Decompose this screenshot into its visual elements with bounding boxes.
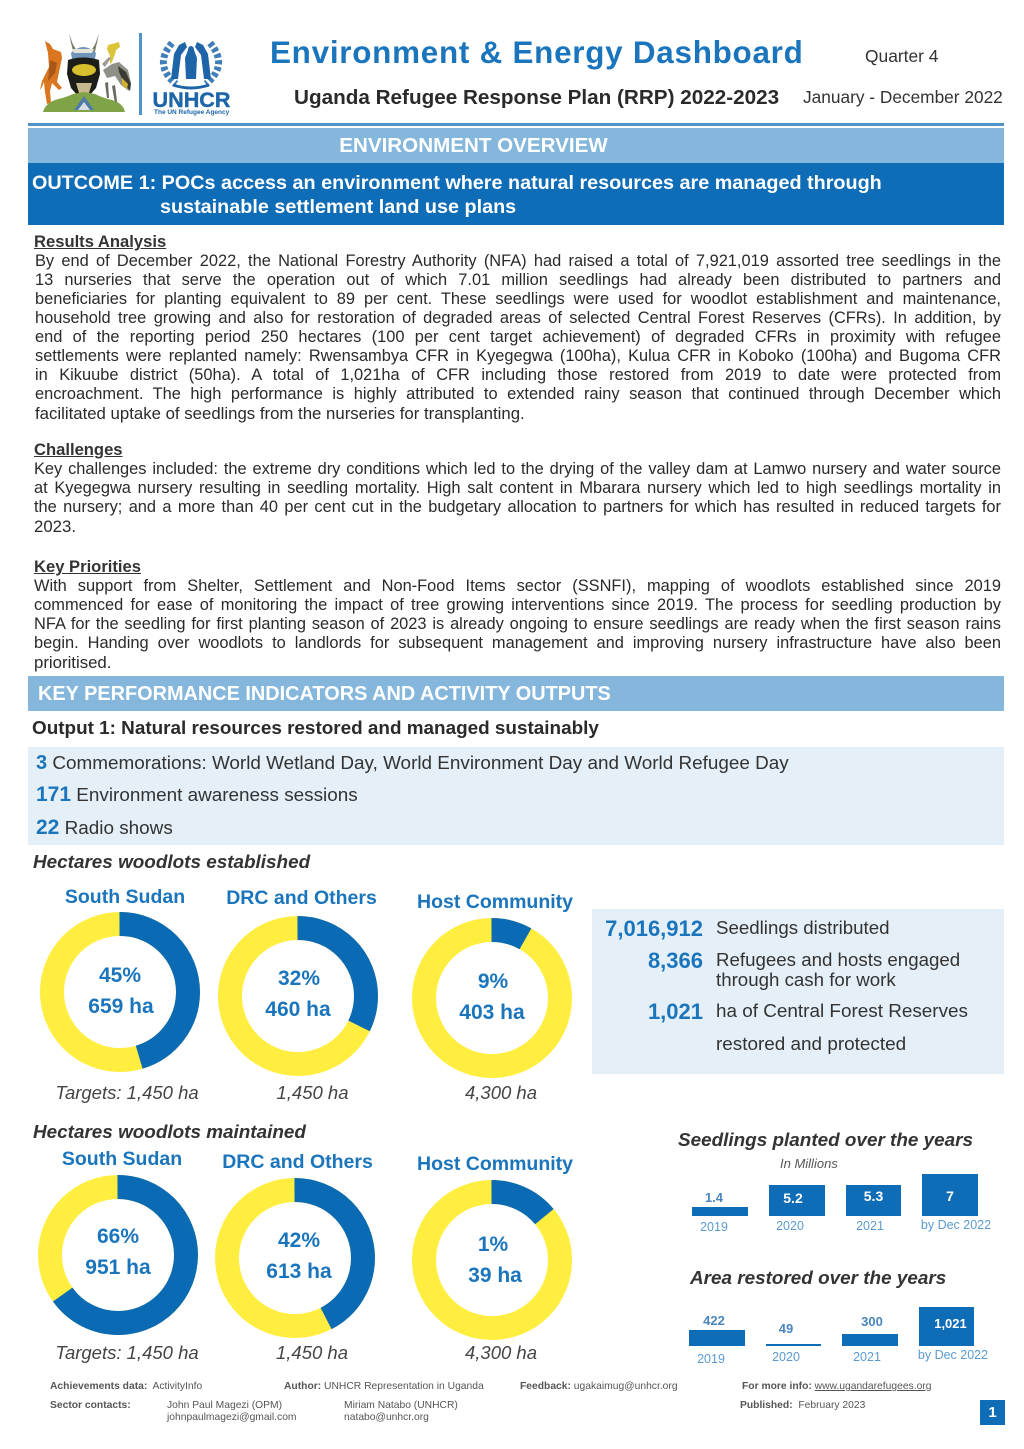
bar chart: seedlings planted: 2020 xyxy=(776,1219,804,1233)
donut title: Host Community xyxy=(417,1153,573,1175)
donut chart xyxy=(215,1178,375,1338)
donut hectares: 951 ha xyxy=(85,1256,151,1279)
stat: awareness sessions: 171 Environment awareness sessions xyxy=(36,783,358,806)
panel: key figures xyxy=(592,909,1004,1074)
text block: challenges: at Kyegegwa nursery resulting in seedling mortality. High salt content in Mbarara nursery which led to high seedlings mortality in xyxy=(34,479,1001,497)
donut value: 45% xyxy=(99,964,141,987)
header rule xyxy=(28,123,1004,126)
text block: results analysis: end of the reporting period 250 hectares (100 per cent target achievement) of degraded CFRs in proximity with refugee xyxy=(35,328,1001,346)
text block: key priorities: begin. Handing over woodlots to landlords for subsequent management and improving nursery infrastructure have also been xyxy=(34,634,1001,652)
figure: people engaged: through cash for work xyxy=(716,969,896,990)
donut group: DRC maintained xyxy=(215,1151,375,1363)
figure: central forest reserves: restored and protected xyxy=(716,1034,906,1055)
title: Environment & Energy Dashboard xyxy=(270,35,804,70)
bar chart: area restored: 1,021 xyxy=(934,1316,967,1331)
footer: OPM contact xyxy=(166,1400,297,1423)
banner: outcome 1 xyxy=(28,163,1004,225)
logo divider xyxy=(139,33,142,115)
donut target: Targets: 1,450 ha xyxy=(55,1082,199,1103)
bar chart: seedlings planted: 5.2 xyxy=(783,1190,803,1206)
footer: UNHCR contact: Miriam Natabo (UNHCR) xyxy=(344,1400,458,1411)
text block: challenges xyxy=(34,460,1001,536)
text block: results analysis: By end of December 2022, the National Forestry Authority (NFA) had raised a total of 7,921,019 assorted tree seedlings in the xyxy=(35,252,1001,270)
donut hectares: 460 ha xyxy=(265,998,331,1021)
banner: key performance indicators: KEY PERFORMANCE INDICATORS AND ACTIVITY OUTPUTS xyxy=(38,683,611,705)
heading: area restored: Area restored over the years xyxy=(690,1268,946,1289)
stat: commemorations: 3 Commemorations: World Wetland Day, World Environment Day and World Refugee Day xyxy=(36,752,789,774)
bar chart: area restored: 300 xyxy=(861,1314,883,1329)
donut group: Host Community established xyxy=(412,891,573,1103)
text block: results analysis: 13 nurseries that serve the operation out of which 7.01 million seedlings had already been distributed to partners and xyxy=(35,271,1001,289)
bar chart: area restored: 2021 xyxy=(853,1350,881,1364)
donut group: South Sudan maintained xyxy=(38,1148,199,1363)
footer: more info: For more info: www.ugandarefugees.org xyxy=(742,1381,931,1392)
subtitle: Uganda Refugee Response Plan (RRP) 2022-2023 xyxy=(294,86,779,109)
page number: 1 xyxy=(988,1404,997,1421)
figure: central forest reserves xyxy=(648,999,968,1055)
banner: environment overview xyxy=(28,128,1004,163)
footer: published: Published: February 2023 xyxy=(740,1400,865,1411)
footer: author: Author: UNHCR Representation in Uganda xyxy=(284,1381,484,1392)
donut chart xyxy=(412,1180,572,1340)
donut value: 32% xyxy=(278,967,320,990)
donut hectares: 659 ha xyxy=(88,995,154,1018)
footer: feedback: Feedback: ugakaimug@unhcr.org xyxy=(520,1381,678,1392)
outcome line 1: OUTCOME 1: POCs access an environment where natural resources are managed through xyxy=(32,172,882,194)
text block: results analysis: household tree growing and also for restoration of degraded areas of selected Central Forest Reserves (CFRs). In addition, by xyxy=(35,309,1001,327)
footer: UNHCR contact: natabo@unhcr.org xyxy=(344,1412,429,1423)
text block: results analysis: facilitated uptake of seedlings from the nurseries for transplanting. xyxy=(35,404,525,423)
bar chart: area restored: 422 xyxy=(703,1313,725,1328)
footer: sector contacts: Sector contacts: xyxy=(50,1400,131,1411)
heading: woodlots maintained: Hectares woodlots maintained xyxy=(33,1122,306,1143)
page number xyxy=(980,1400,1005,1425)
donut title: Host Community xyxy=(417,891,573,913)
heading: output 1: Output 1: Natural resources restored and managed sustainably xyxy=(32,718,599,739)
text block: results analysis: settlements were replanted namely: Rwensambya CFR in Kyegegwa (100ha), Kulua CFR in Koboko (100ha) and Bugoma CFR xyxy=(35,347,1001,365)
text block: key priorities: With support from Shelter, Settlement and Non-Food Items sector (SSNFI), mapping of woodlots established since 2019 xyxy=(34,577,1001,595)
donut target: 1,450 ha xyxy=(276,1342,348,1363)
donut title: DRC and Others xyxy=(222,1151,373,1173)
outcome line 2: sustainable settlement land use plans xyxy=(160,196,516,218)
figure: central forest reserves: 1,021 xyxy=(648,999,703,1024)
logo: Uganda coat of arms xyxy=(40,33,131,112)
donut value: 66% xyxy=(97,1225,139,1248)
heading: woodlots established: Hectares woodlots established xyxy=(33,852,310,873)
panel: activity counts xyxy=(28,747,1004,845)
text block: key priorities: NFA for the seedling for first planting season of 2023 is already ongoing to ensure seedlings are ready when the first season rains xyxy=(34,615,1001,633)
donut group: Host Community maintained xyxy=(412,1153,573,1363)
donut chart xyxy=(218,916,378,1076)
heading: seedlings planted: Seedlings planted over the years xyxy=(678,1130,973,1151)
period label: January - December 2022 xyxy=(803,87,1003,107)
footer: OPM contact: johnpaulmagezi@gmail.com xyxy=(167,1412,297,1423)
donut target: Targets: 1,450 ha xyxy=(55,1342,199,1363)
text block: results analysis xyxy=(35,252,1001,423)
donut hectares: 403 ha xyxy=(459,1001,525,1024)
logo: UNHCR xyxy=(152,40,230,116)
bar chart: area restored: 2020 xyxy=(772,1350,800,1364)
bar chart: area restored: 49 xyxy=(779,1321,793,1336)
banner: key performance indicators xyxy=(28,676,1004,711)
footer: UNHCR contact xyxy=(344,1400,458,1423)
heading: results analysis: Results Analysis xyxy=(34,232,166,251)
donut target: 4,300 ha xyxy=(465,1342,537,1363)
figure: central forest reserves: ha of Central Forest Reserves xyxy=(716,1001,968,1022)
text block: challenges: Key challenges included: the extreme dry conditions which led to the drying of the valley dam at Lamwo nursery and water source xyxy=(34,460,1001,478)
figure: seedlings distributed: Seedlings distributed xyxy=(716,917,890,938)
text block: results analysis: encroachment. The high performance is highly attributed to extended rainy season that continued through December which xyxy=(35,385,1001,403)
text block: key priorities xyxy=(34,577,1001,672)
donut group: DRC established xyxy=(218,887,378,1103)
donut title: South Sudan xyxy=(62,1148,182,1170)
footer: achievements data: Achievements data: ActivityInfo xyxy=(50,1381,202,1392)
donut title: DRC and Others xyxy=(226,887,377,909)
stat: radio shows: 22 Radio shows xyxy=(36,816,173,839)
donut value: 1% xyxy=(478,1233,508,1256)
bar chart: area restored: by Dec 2022 xyxy=(918,1348,988,1362)
bar chart: seedlings planted: 2019 xyxy=(700,1220,728,1234)
donut hectares: 613 ha xyxy=(266,1260,332,1283)
bar chart: seedlings planted: 1.4 xyxy=(705,1190,723,1205)
bar chart: seedlings planted xyxy=(692,1174,991,1234)
text block: results analysis: in Kikuube district (50ha). A total of 1,021ha of CFR including those restored from 2019 to date were protected from xyxy=(35,366,1001,384)
UNHCR wordmark: UNHCR xyxy=(152,87,230,112)
figure: seedlings distributed xyxy=(605,916,890,941)
bar chart: seedlings planted: 7 xyxy=(946,1188,954,1204)
banner: environment overview: ENVIRONMENT OVERVIEW xyxy=(339,134,608,157)
donut target: 1,450 ha xyxy=(276,1082,348,1103)
bar chart: seedlings planted: 5.3 xyxy=(864,1188,883,1204)
donut hectares: 39 ha xyxy=(468,1264,522,1287)
footer: OPM contact: John Paul Magezi (OPM) xyxy=(167,1400,282,1411)
donut chart xyxy=(40,912,200,1072)
text block: challenges: the nursery; and a more than 40 per cent cut in the budgetary allocation to partners for which has resulted in reduced targets for xyxy=(34,498,1001,516)
donut group: South Sudan established xyxy=(40,886,200,1103)
text block: results analysis: beneficiaries for planting equivalent to 89 per cent. These seedlings were used for woodlot establishment and maintenance, xyxy=(35,290,1001,308)
figure: people engaged xyxy=(648,948,960,990)
bar chart: seedlings planted: by Dec 2022 xyxy=(921,1218,991,1232)
donut target: 4,300 ha xyxy=(465,1082,537,1103)
donut chart xyxy=(38,1175,198,1335)
figure: seedlings distributed: 7,016,912 xyxy=(605,916,703,941)
icon: UNHCR emblem xyxy=(160,40,222,90)
footer xyxy=(50,1381,931,1423)
chart note: in millions: In Millions xyxy=(780,1156,838,1171)
quarter label: Quarter 4 xyxy=(865,46,938,66)
text block: challenges: 2023. xyxy=(34,517,76,536)
figure: people engaged: Refugees and hosts engaged xyxy=(716,949,960,970)
text block: key priorities: commenced for ease of monitoring the impact of tree growing interventions since 2019. The process for seedling production by xyxy=(34,596,1001,614)
donut value: 9% xyxy=(478,970,508,993)
UNHCR tagline: The UN Refugee Agency xyxy=(154,109,229,116)
heading: key priorities: Key Priorities xyxy=(34,557,141,576)
bar chart: area restored xyxy=(689,1307,988,1366)
heading: challenges: Challenges xyxy=(34,440,123,459)
donut title: South Sudan xyxy=(65,886,185,908)
bar chart: seedlings planted: 2021 xyxy=(856,1219,884,1233)
figure: people engaged: 8,366 xyxy=(648,948,703,973)
donut value: 42% xyxy=(278,1229,320,1252)
bar chart: area restored: 2019 xyxy=(697,1352,725,1366)
donut chart xyxy=(412,918,572,1078)
text block: key priorities: prioritised. xyxy=(34,653,111,672)
